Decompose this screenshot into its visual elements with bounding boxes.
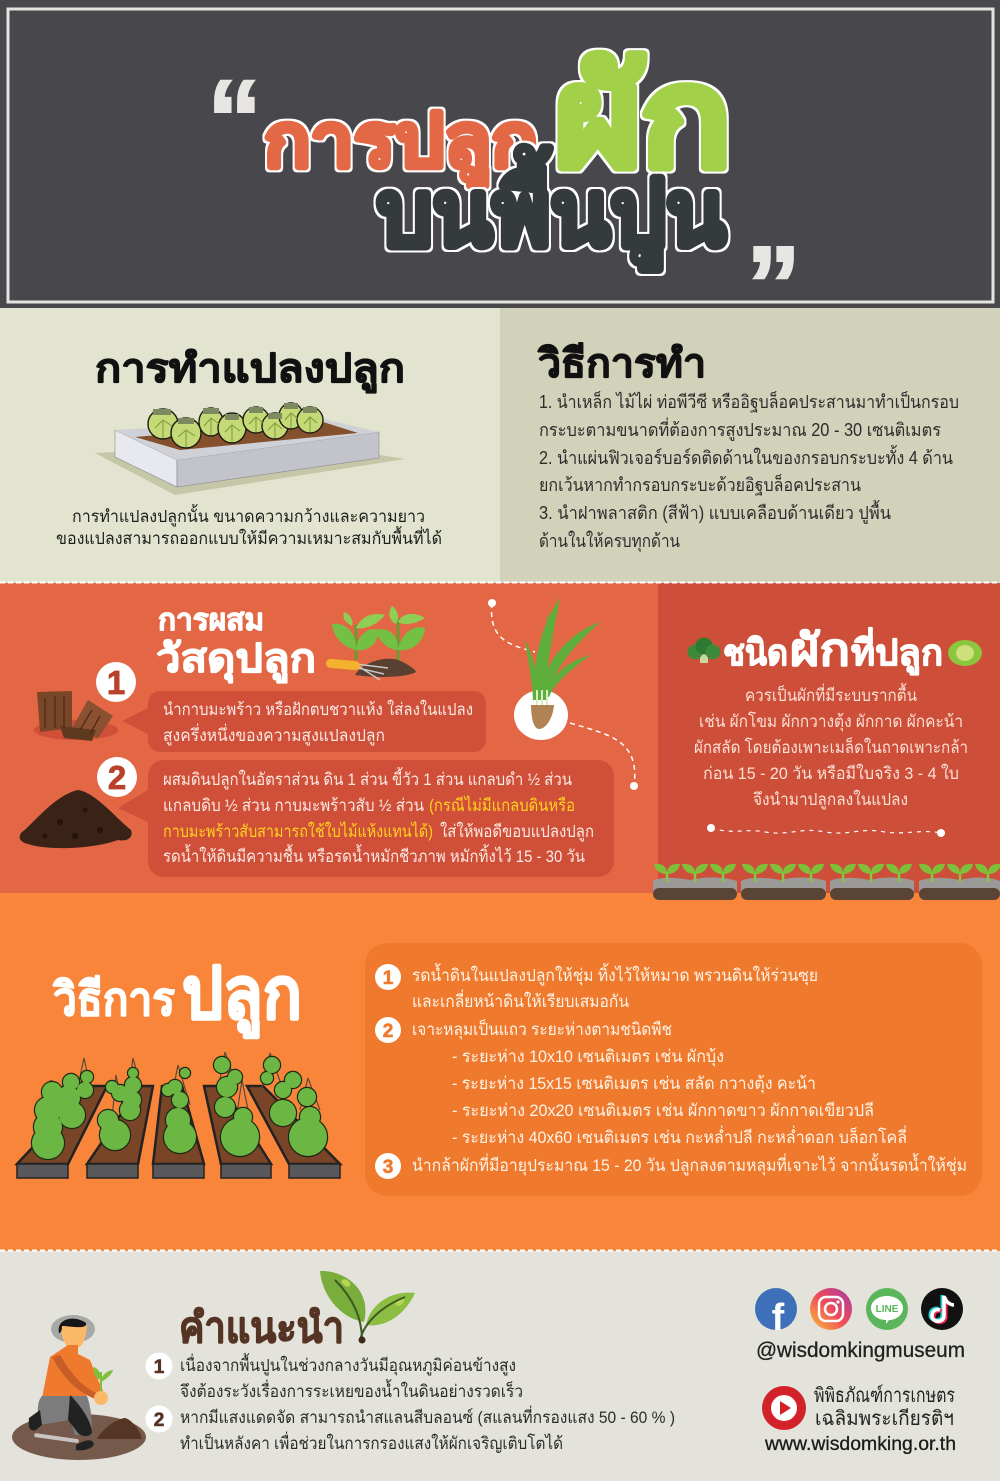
callout: step 1: นำกาบมะพร้าว หรือฝักตบชวาแห้ง ใส่ลงในแปลง <box>163 699 473 719</box>
heading: how to plant: ปลูก <box>182 954 302 1039</box>
text: planting steps: นำกล้าผักที่มีอายุประมาณ 15 - 20 วัน ปลูกลงตามหลุมที่เจาะไว้ จากนั้นรดน้ำให้ชุ่ม <box>412 1153 967 1176</box>
text: planting steps: - ระยะห่าง 15x15 เซนติเมตร เช่น สลัด กวางตุ้ง คะน้า <box>452 1074 816 1094</box>
panel: method steps <box>500 308 1000 582</box>
badge: step 3: 3 <box>383 1157 393 1178</box>
heading: mixing materials <box>156 604 316 684</box>
text: vegetable types description: ผักสลัด โดยต้องเพาะเมล็ดในถาดเพาะกล้า <box>694 736 968 757</box>
badge: step 2: 2 <box>383 1021 393 1042</box>
text: method steps: 3. นำฝาพลาสติก (สีฟ้า) แบบเคลือบด้านเดียว ปูพื้น <box>539 500 891 524</box>
text: planting steps: - ระยะห่าง 20x20 เซนติเมตร เช่น ผักกาดขาว ผักกาดเขียวปลี <box>452 1101 874 1120</box>
heading: making the bed: การทำแปลงปลูก <box>95 347 405 393</box>
text: vegetable types description: ควรเป็นผักที่มีระบบรากตื้น <box>745 683 917 705</box>
icon: line: LINE <box>876 1304 899 1315</box>
heading: how to plant: วิธีการ <box>52 973 175 1025</box>
icon: seedlings and trowel <box>326 606 425 680</box>
illustration: farmer planting seedling <box>12 1315 146 1460</box>
text: vegetable types description: เช่น ผักโขม ผักกวางตุ้ง ผักกาด ผักคะน้า <box>699 711 963 732</box>
callout: step 2: ใส่ให้พอดีขอบแปลงปลูก <box>440 821 594 842</box>
illustration: garden beds with trellised plants <box>17 1052 340 1178</box>
text: advice: จึงต้องระวังเรื่องการระเหยของน้ำในดินอย่างรวดเร็ว <box>180 1379 523 1401</box>
text: museum name <box>814 1384 955 1430</box>
badge: step 3 <box>375 1153 401 1179</box>
callout: step 2 <box>118 760 614 877</box>
text: vegetable types description: ก่อน 15 - 20 วัน หรือมีใบจริง 3 - 4 ใบ <box>703 763 959 783</box>
badge: step 1: 1 <box>383 968 394 989</box>
callout: step 2: กาบมะพร้าวสับสามารถใช้ใบไม้แห้งแทนได้) <box>163 821 433 841</box>
callout: step 2: แกลบดิบ ½ ส่วน กาบมะพร้าวสับ ½ ส่วน <box>163 796 424 815</box>
text: method steps: ด้านในให้ครบทุกด้าน <box>539 530 680 552</box>
title word: vegetable: ผัก <box>555 42 731 194</box>
icon: broccoli <box>688 638 720 663</box>
icon: youtube <box>762 1386 806 1430</box>
callout: step 2: ผสมดินปลูกในอัตราส่วน ดิน 1 ส่วน ขี้วัว 1 ส่วน แกลบดำ ½ ส่วน <box>163 767 572 790</box>
icon: instagram <box>810 1288 852 1330</box>
text: planting steps: รดน้ำดินในแปลงปลูกให้ชุ่ม ทิ้งไว้ให้หมาด พรวนดินให้ร่วนซุย <box>412 963 818 986</box>
handle: social account: @wisdomkingmuseum <box>756 1339 965 1362</box>
caption: bed sizing: การทำแปลงปลูกนั้น ขนาดความกว้างและความยาว <box>72 504 425 527</box>
heading: how to plant <box>52 954 302 1039</box>
dotted connector <box>707 824 945 837</box>
badge: step 1 <box>375 964 401 990</box>
heading: method: วิธีการทำ <box>537 342 706 386</box>
icon: soil pile <box>20 790 132 848</box>
text: vegetable types description <box>694 683 968 810</box>
callout: step 1 <box>122 691 486 752</box>
panel: making the bed <box>0 308 500 582</box>
badge: advice 1 <box>146 1352 172 1380</box>
icon: tiktok <box>921 1288 963 1330</box>
heading: vegetable types: ผัก <box>790 626 850 675</box>
text: museum name: เฉลิมพระเกียรติฯ <box>815 1408 954 1430</box>
caption: bed sizing <box>56 504 442 548</box>
panel: mixing planting material <box>0 583 660 893</box>
text: method steps: ยกเว้นหากทำกรอบกระบะด้วยอิฐบล็อคประสาน <box>539 473 861 496</box>
text: method steps: กระบะตามขนาดที่ต้องการสูงประมาณ 20 - 30 เซนติเมตร <box>539 417 941 441</box>
text: planting steps: และเกลี่ยหน้าดินให้เรียบเสมอกัน <box>412 989 629 1011</box>
panel: advice and contacts <box>0 1251 1000 1481</box>
seedling rows <box>653 864 1000 900</box>
icon: cabbage <box>948 640 982 666</box>
panel: title banner <box>0 0 1000 347</box>
heading: vegetable types: ที่ปลูก <box>851 627 943 676</box>
heading: vegetable types: ชนิด <box>723 632 788 673</box>
text: website: www.wisdomking.or.th <box>764 1434 956 1455</box>
text: vegetable types description: จึงนำมาปลูกลงในแปลง <box>753 789 908 810</box>
heading: mixing materials: วัสดุปลูก <box>156 637 316 684</box>
badge: number 1: 1 <box>107 664 125 701</box>
text: planting steps: - ระยะห่าง 40x60 เซนติเมตร เช่น กะหล่ำปลี กะหล่ำดอก บล็อกโคลี่ <box>452 1125 907 1147</box>
badge: number 2 <box>97 757 137 797</box>
closing quotation mark: ” <box>746 224 801 347</box>
text: planting steps: - ระยะห่าง 10x10 เซนติเมตร เช่น ผักบุ้ง <box>452 1047 724 1067</box>
panel: vegetable types <box>653 583 1000 900</box>
icon: facebook <box>755 1288 797 1339</box>
title line: bottom: บนพื้นปูน <box>377 146 726 271</box>
caption: bed sizing: ของแปลงสามารถออกแบบให้มีความเหมาะสมกับพื้นที่ได้ <box>56 526 442 548</box>
icon: facebook: f <box>772 1297 785 1339</box>
text: planting steps: เจาะหลุมเป็นแถว ระยะห่างตามชนิดพืช <box>412 1018 672 1040</box>
badge: advice 1: 1 <box>154 1357 165 1378</box>
icon: seedling plug with dotted path <box>488 598 638 790</box>
icon: sprout leaves <box>320 1271 415 1344</box>
badge: advice 2 <box>146 1406 172 1432</box>
callout: step 2: (กรณีไม่มีแกลบดินหรือ <box>429 795 575 815</box>
badge: advice 2: 2 <box>154 1410 164 1431</box>
illustration: raised bed with cabbages <box>95 403 405 495</box>
badge: number 2: 2 <box>108 759 126 796</box>
opening quotation mark: “ <box>207 58 262 181</box>
text: planting steps <box>412 963 967 1176</box>
badge: step 2 <box>375 1017 401 1043</box>
text: method steps <box>539 390 959 552</box>
heading: advice: คำแนะนำ <box>179 1304 344 1351</box>
text: advice: หากมีแสงแดดจัด สามารถนำสแลนสีบลอนซ์ (สแลนที่กรองแสง 50 - 60 % ) <box>180 1405 675 1427</box>
text: method steps: 1. นำเหล็ก ไม้ไผ่ ท่อพีวีซี หรืออิฐบล็อคประสานมาทำเป็นกรอบ <box>539 390 959 413</box>
icon: coconut husks <box>34 691 118 741</box>
callout: step 1: สูงครึ่งหนึ่งของความสูงแปลงปลูก <box>163 723 385 746</box>
text: museum name: พิพิธภัณฑ์การเกษตร <box>814 1384 955 1407</box>
callout: step 2: รดน้ำให้ดินมีความชื้น หรือรดน้ำหมักชีวภาพ หมักทิ้งไว้ 15 - 30 วัน <box>163 844 585 866</box>
panel: planting method <box>0 893 1000 1251</box>
text: method steps: 2. นำแผ่นฟิวเจอร์บอร์ดติดด้านในของกรอบกระบะทั้ง 4 ด้าน <box>539 445 953 468</box>
text: advice: เนื่องจากพื้นปูนในช่วงกลางวันมีอุณหภูมิค่อนข้างสูง <box>180 1353 516 1376</box>
text: advice: ทำเป็นหลังคา เพื่อช่วยในการกรองแสงให้ผักเจริญเติบโตได้ <box>180 1431 563 1453</box>
title line: planting: การปลูก <box>264 99 538 187</box>
panel: planting steps <box>365 943 982 1196</box>
icon: line <box>866 1288 908 1330</box>
badge: number 1 <box>96 662 136 702</box>
text: advice <box>180 1353 675 1453</box>
heading: mixing materials: การผสม <box>158 604 264 637</box>
heading: vegetable types <box>723 626 943 676</box>
